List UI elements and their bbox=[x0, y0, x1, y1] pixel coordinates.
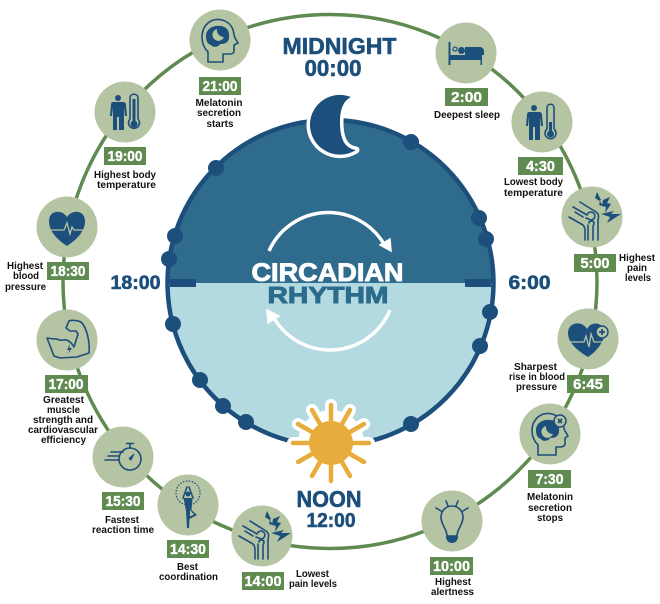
event: 7:30 melatonin secretion stops: 7:30 bbox=[536, 472, 564, 488]
icon: tree pose figure bbox=[176, 481, 200, 528]
title: circadian rhythm bbox=[252, 259, 404, 308]
icon: head with moon bbox=[202, 19, 238, 62]
event: 7:30 melatonin secretion stops: stops bbox=[537, 513, 563, 524]
event: 14:30 best coordination: Best bbox=[177, 562, 199, 573]
event: 19:00 highest body temperature bbox=[94, 82, 156, 191]
event: 15:30 fastest reaction time: Fastest bbox=[105, 515, 140, 526]
event: 10:00 highest alertness: Highest bbox=[435, 577, 472, 588]
event: 14:00 lowest pain levels: Lowest bbox=[296, 569, 330, 580]
event: 18:30 highest blood pressure: pressure bbox=[5, 282, 46, 293]
event: 6:45 sharpest rise in blood pressure bbox=[509, 308, 618, 393]
event: 21:00 melatonin secretion starts: starts bbox=[206, 119, 234, 130]
event: 21:00 melatonin secretion starts: 21:00 bbox=[202, 79, 238, 95]
event: 14:30 best coordination: 14:30 bbox=[170, 542, 206, 558]
event: 4:30 lowest body temperature: temperature bbox=[504, 188, 563, 199]
heading: midnight: 00:00 bbox=[304, 55, 362, 81]
title: circadian rhythm: CIRCADIAN bbox=[252, 259, 404, 287]
event: 2:00 deepest sleep bbox=[434, 22, 500, 121]
icon: moon bbox=[310, 95, 356, 155]
heading: noon: NOON bbox=[296, 486, 362, 512]
event: 7:30 melatonin secretion stops: Melatonin bbox=[527, 492, 573, 503]
event: 6:45 sharpest rise in blood pressure: rise in blood bbox=[509, 372, 565, 383]
icon: heart with plus bbox=[568, 323, 608, 357]
heading: noon: 12:00 bbox=[306, 509, 356, 532]
event: 4:30 lowest body temperature: Lowest body bbox=[504, 177, 563, 188]
label: 6:00: 6:00 bbox=[508, 273, 550, 294]
event: 21:00 melatonin secretion starts: secretion bbox=[197, 108, 241, 119]
event: 10:00 highest alertness: 10:00 bbox=[433, 559, 470, 575]
event: 4:30 lowest body temperature: 4:30 bbox=[526, 159, 555, 175]
event: 15:30 fastest reaction time: reaction time bbox=[92, 525, 154, 536]
event: 17:00 greatest muscle strength: muscle bbox=[47, 405, 80, 416]
event: 17:00 greatest muscle strength: cardiovascular bbox=[28, 425, 98, 436]
title: circadian rhythm: RHYTHM bbox=[268, 282, 388, 308]
icon: head with moon crossed bbox=[532, 413, 568, 455]
event: 17:00 greatest muscle strength: strength and bbox=[33, 415, 93, 426]
event: 15:30 fastest reaction time bbox=[92, 426, 154, 536]
event: 17:00 greatest muscle strength bbox=[28, 310, 98, 446]
event: 17:00 greatest muscle strength: Greatest bbox=[43, 395, 85, 406]
icon: person and thermometer high bbox=[110, 94, 140, 130]
event: 18:30 highest blood pressure: blood bbox=[13, 271, 39, 282]
event: 14:00 lowest pain levels bbox=[232, 506, 337, 590]
central clock disc bbox=[168, 120, 494, 446]
icon: knee with lightning bbox=[239, 511, 291, 559]
event: 19:00 highest body temperature: 19:00 bbox=[108, 149, 142, 165]
icon: sun bbox=[293, 405, 369, 481]
event: 10:00 highest alertness bbox=[422, 490, 482, 598]
icon: knee with lightning bbox=[569, 192, 621, 240]
event: 4:30 lowest body temperature bbox=[504, 92, 572, 199]
event: 15:30 fastest reaction time: 15:30 bbox=[106, 494, 140, 510]
event: 19:00 highest body temperature: temperature bbox=[97, 180, 156, 191]
event: 2:00 deepest sleep: Deepest sleep bbox=[434, 110, 500, 121]
heading: midnight bbox=[282, 33, 396, 81]
event: 18:30 highest blood pressure bbox=[5, 196, 98, 293]
event: 18:30 highest blood pressure: 18:30 bbox=[50, 264, 86, 280]
event: 17:00 greatest muscle strength: 17:00 bbox=[48, 377, 84, 393]
arrow: clockwise upper bbox=[269, 213, 391, 251]
heading: midnight: MIDNIGHT bbox=[282, 33, 396, 59]
icon: heart with pulse bbox=[49, 212, 85, 246]
event: 17:00 greatest muscle strength: efficiency bbox=[41, 435, 86, 446]
event: 6:45 sharpest rise in blood pressure: pressure bbox=[516, 382, 557, 393]
event: 7:30 melatonin secretion stops bbox=[520, 404, 580, 524]
event: 21:00 melatonin secretion starts: Melatonin bbox=[196, 98, 242, 109]
event: 5:00 highest pain levels: levels bbox=[625, 273, 651, 284]
event: 14:00 lowest pain levels: pain levels bbox=[289, 579, 337, 590]
event: 6:45 sharpest rise in blood pressure: Sharpest bbox=[514, 362, 558, 373]
icon: bed bbox=[448, 42, 484, 65]
event: 14:30 best coordination: coordination bbox=[159, 572, 218, 583]
event: 2:00 deepest sleep: 2:00 bbox=[451, 90, 482, 106]
event: 18:30 highest blood pressure: Highest bbox=[7, 261, 44, 272]
event: 5:00 highest pain levels bbox=[562, 186, 656, 284]
event: 7:30 melatonin secretion stops: secretion bbox=[528, 503, 572, 514]
hour dots on clock ring bbox=[161, 134, 498, 432]
event: 5:00 highest pain levels: 5:00 bbox=[580, 256, 610, 272]
event: 5:00 highest pain levels: pain bbox=[627, 263, 647, 274]
event: 6:45 sharpest rise in blood pressure: 6:45 bbox=[573, 377, 603, 393]
outer green timeline ring bbox=[63, 14, 597, 548]
icon: person and thermometer low bbox=[526, 104, 556, 140]
event: 19:00 highest body temperature: Highest body bbox=[94, 170, 156, 181]
arrow: clockwise lower bbox=[267, 310, 390, 350]
label: 18:00: 18:00 bbox=[110, 273, 160, 294]
event: 14:00 lowest pain levels: 14:00 bbox=[244, 574, 282, 590]
event: 14:30 best coordination bbox=[158, 474, 218, 583]
icon: stopwatch bbox=[105, 444, 141, 470]
heading: noon bbox=[296, 486, 362, 532]
event: 5:00 highest pain levels: Highest bbox=[619, 253, 656, 264]
event: 21:00 melatonin secretion starts bbox=[190, 10, 250, 130]
event: 10:00 highest alertness: alertness bbox=[431, 587, 474, 598]
icon: light bulb bbox=[436, 501, 468, 543]
icon: flexed arm bbox=[47, 320, 89, 358]
